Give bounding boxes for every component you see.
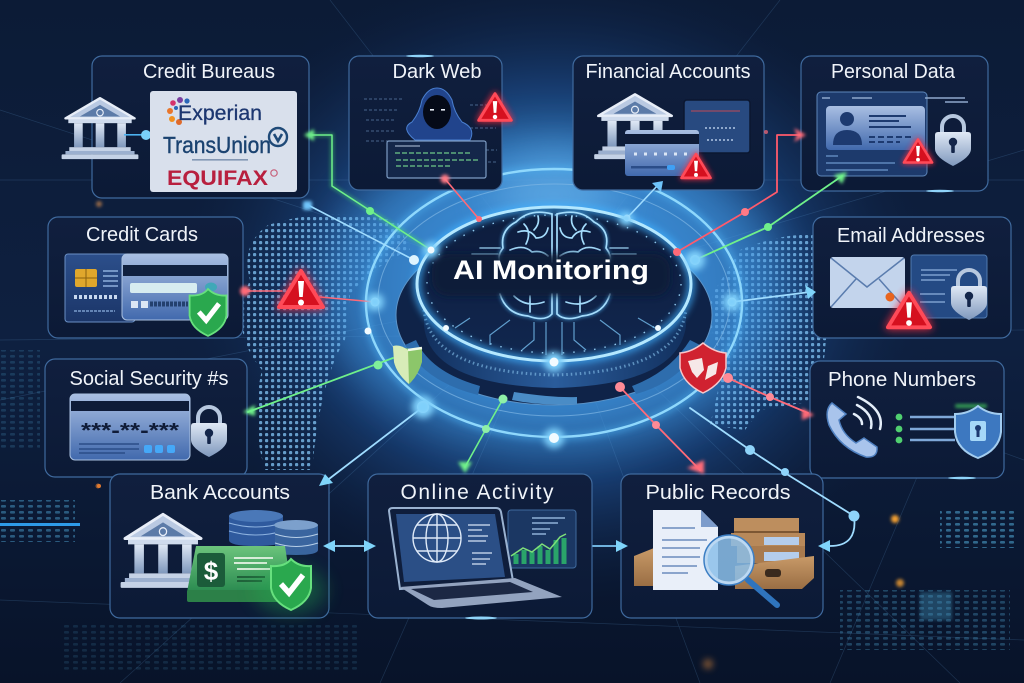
icon: coin stacks (229, 510, 318, 555)
panel: Phone Numbers (810, 361, 1004, 478)
heading: Social Security #s (70, 368, 228, 390)
code lines (364, 99, 497, 162)
world map dots left (241, 214, 410, 470)
front card (122, 254, 228, 320)
icon: envelope (830, 257, 905, 308)
circuit traces (455, 318, 655, 355)
green link: social security (243, 358, 393, 416)
bureau logos card (150, 91, 297, 192)
alert icon: credit cards link (279, 271, 323, 307)
alert icon (904, 139, 932, 163)
platform top disc (417, 207, 691, 361)
icon: bank (594, 94, 676, 159)
back card (65, 254, 135, 322)
icon: globe (413, 514, 461, 562)
icon: bank (121, 514, 205, 588)
icon: phone (827, 397, 881, 457)
icon: padlock (191, 407, 227, 457)
ring glow nodes (364, 212, 741, 448)
blue link: public records side (690, 408, 860, 552)
icon: document (653, 510, 718, 590)
record panel (817, 92, 968, 176)
card (625, 130, 699, 176)
blue link: financial accounts (624, 181, 663, 222)
panel: Bank Accounts (110, 474, 329, 618)
red link: dark web (440, 174, 482, 222)
world map dots right (709, 234, 850, 430)
red link: public records (615, 382, 704, 474)
chart panel (508, 510, 576, 568)
logo: Equifax: EQUIFAX (167, 167, 268, 190)
card: ***-**-*** (81, 420, 179, 442)
icon: boxes (634, 518, 814, 589)
panel: Financial Accounts (573, 56, 764, 190)
icon: green shield (393, 346, 422, 384)
icon: magnifying glass (704, 535, 777, 605)
heading: Email Addresses (837, 225, 985, 247)
alert icon (681, 154, 711, 178)
info panel (911, 255, 987, 318)
icon: bank (62, 98, 138, 159)
green link: personal data (690, 172, 847, 265)
green link: credit bureaus (304, 129, 431, 250)
icon: brain (472, 212, 636, 319)
logo: TransUnion: TransUnion (163, 132, 271, 158)
platform side wall (424, 290, 686, 388)
heading: Personal Data (831, 61, 956, 83)
outer rings (366, 169, 742, 437)
ID card (826, 106, 925, 150)
heading: Credit Cards (86, 224, 198, 246)
green link: online activity (458, 394, 508, 473)
central AI monitoring platform (366, 169, 742, 437)
blue link: email (728, 285, 816, 306)
blue link: credit bureaus lower (303, 201, 419, 265)
red link: personal data (673, 128, 806, 256)
panel: Online Activity (368, 474, 592, 618)
arrow: online to public (593, 540, 628, 552)
icon: shield check (190, 289, 226, 336)
red link: phone numbers (723, 373, 814, 420)
heading: Online Activity (400, 481, 554, 504)
data dots lower right (703, 508, 1018, 669)
red link: credit cards (240, 286, 380, 306)
panel: Personal Data (801, 56, 988, 191)
heading: Public Records (646, 482, 790, 504)
icon: shield check (271, 559, 311, 610)
status list (896, 404, 987, 443)
alert icon (479, 94, 511, 120)
double arrow: bank to online (323, 540, 376, 552)
icon: laptop (389, 508, 562, 608)
panel: Dark Web (349, 56, 511, 190)
panel: Social Security #s (45, 359, 247, 477)
card (70, 394, 190, 460)
data dots lower left (0, 201, 360, 670)
heading band (432, 254, 670, 296)
panel: Public Records (621, 474, 823, 618)
panel: Credit Bureaus (62, 56, 309, 198)
icon: padlock (951, 270, 987, 320)
icon: shield (955, 406, 1001, 458)
icon: cash stack: $ (204, 556, 219, 586)
logo: Experian: Experian (178, 102, 262, 125)
terminal screen (387, 141, 486, 178)
alert icon (888, 293, 930, 327)
heading: Dark Web (392, 61, 482, 83)
icon: red shield (680, 343, 726, 393)
heading: Phone Numbers (828, 369, 976, 391)
connector dot (124, 130, 151, 140)
heading: Credit Bureaus (143, 61, 275, 83)
connectors (240, 128, 860, 552)
accent glints (406, 55, 976, 620)
panel: Email Addresses (813, 217, 1011, 338)
icon: hooded figure (407, 88, 472, 140)
statement panel (684, 100, 750, 153)
heading: Financial Accounts (586, 61, 750, 83)
icon: padlock (935, 116, 971, 166)
panel: Credit Cards (48, 217, 243, 338)
title: AI Monitoring: AI Monitoring (453, 255, 649, 285)
heading: Bank Accounts (150, 482, 290, 504)
icon: cash stack (187, 546, 326, 614)
blue link: bank accounts (319, 401, 429, 486)
